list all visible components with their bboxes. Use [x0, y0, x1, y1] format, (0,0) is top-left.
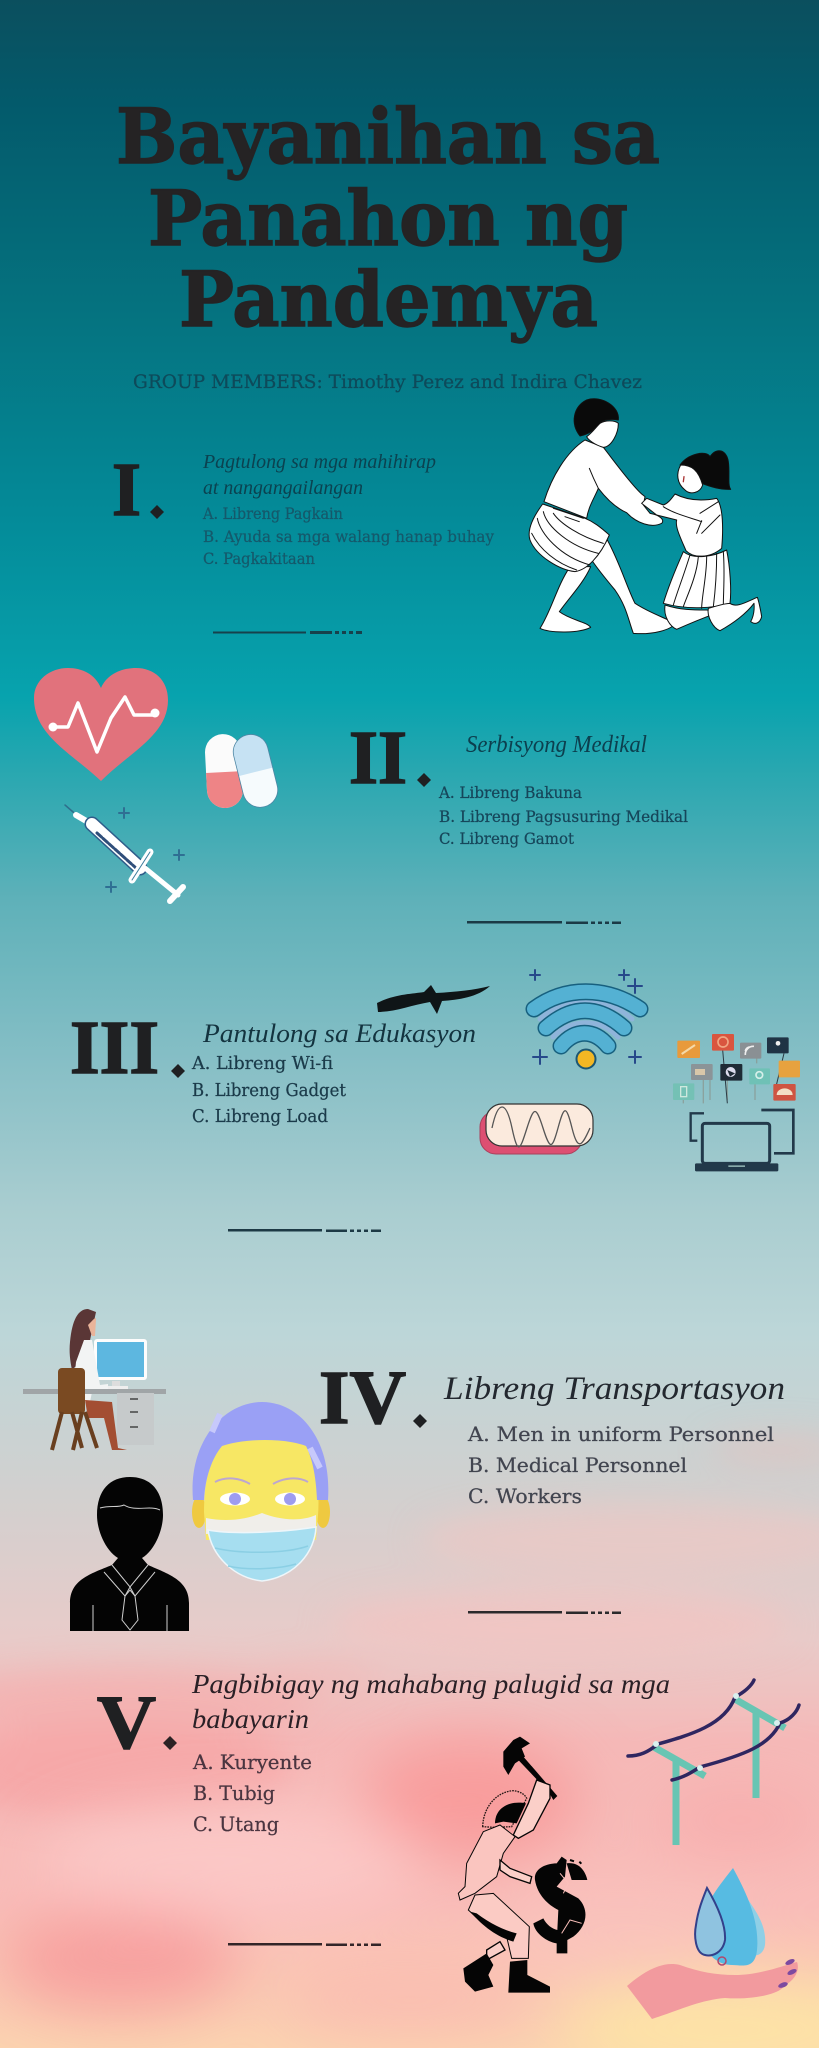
heading V	[191, 1669, 670, 1734]
section V	[97, 1669, 670, 1946]
heading V: Pagbibigay ng mahabang palugid sa mga	[191, 1669, 670, 1699]
numeral I: I	[112, 448, 141, 532]
section IV	[319, 1356, 785, 1614]
list IV: B. Medical Personnel	[468, 1453, 687, 1477]
title	[116, 92, 660, 344]
list V	[192, 1750, 312, 1836]
heading II: Serbisyong Medikal	[466, 732, 647, 758]
list II: A. Libreng Bakuna	[438, 783, 582, 802]
numeral I	[112, 448, 164, 532]
list V: C. Utang	[193, 1812, 279, 1836]
heading I	[202, 451, 436, 499]
numeral V	[97, 1681, 177, 1765]
numeral II: II	[349, 716, 407, 800]
list IV: C. Workers	[468, 1484, 582, 1508]
divider I	[213, 631, 362, 634]
title: Bayanihan sa	[116, 92, 660, 181]
list III: B. Libreng Gadget	[192, 1080, 347, 1101]
illustration: two people helping	[529, 399, 762, 634]
icon: heart with heartbeat	[34, 668, 168, 781]
list III: A. Libreng Wi-fi	[191, 1053, 333, 1074]
list III	[191, 1053, 347, 1127]
list I	[202, 505, 494, 568]
numeral V: V	[97, 1681, 156, 1765]
icon: pink card with wave	[480, 1104, 593, 1154]
icon: syringe	[65, 805, 184, 901]
divider V	[228, 1943, 381, 1946]
icon: face with mask	[192, 1402, 330, 1581]
group members line: GROUP MEMBERS: Timothy Perez and Indira Chavez	[133, 372, 642, 393]
icon: power lines	[628, 1680, 799, 1845]
section II	[349, 716, 688, 924]
title: Panahon ng	[148, 174, 628, 263]
icon: water drops over hand	[627, 1868, 798, 2019]
list III: C. Libreng Load	[192, 1106, 328, 1127]
numeral III: III	[70, 1006, 159, 1090]
list II	[438, 783, 688, 848]
heading III: Pantulong sa Edukasyon	[202, 1019, 476, 1048]
divider IV	[468, 1611, 621, 1614]
woman	[642, 494, 723, 556]
list IV: A. Men in uniform Personnel	[467, 1422, 774, 1446]
heading I: at nangangailangan	[203, 477, 363, 499]
man	[592, 540, 675, 634]
list I: B. Ayuda sa mga walang hanap buhay	[203, 528, 494, 546]
heading IV: Libreng Transportasyon	[443, 1371, 785, 1407]
list V: A. Kuryente	[192, 1750, 312, 1774]
list II: B. Libreng Pagsusuring Medikal	[439, 807, 688, 826]
icon: woman at desk	[23, 1309, 166, 1450]
list V: B. Tubig	[193, 1781, 275, 1805]
list II: C. Libreng Gamot	[439, 829, 575, 848]
list I: C. Pagkakitaan	[203, 550, 315, 568]
title: Pandemya	[179, 255, 598, 344]
list I: A. Libreng Pagkain	[202, 505, 343, 523]
section I	[112, 448, 494, 634]
heading V: babayarin	[192, 1704, 309, 1734]
icon: wifi	[530, 970, 642, 1068]
divider III	[228, 1229, 381, 1232]
icon: pills	[204, 731, 281, 811]
numeral IV: IV	[319, 1356, 406, 1440]
icon: man in suit silhouette	[70, 1477, 189, 1631]
list IV	[467, 1422, 774, 1508]
icon: devices with social apps	[673, 1034, 800, 1171]
divider II	[467, 921, 621, 924]
icon: man hammering dollar sign	[458, 1737, 587, 1993]
section III	[70, 1006, 476, 1232]
icon: bird	[377, 985, 490, 1014]
heading I: Pagtulong sa mga mahihirap	[202, 451, 436, 473]
